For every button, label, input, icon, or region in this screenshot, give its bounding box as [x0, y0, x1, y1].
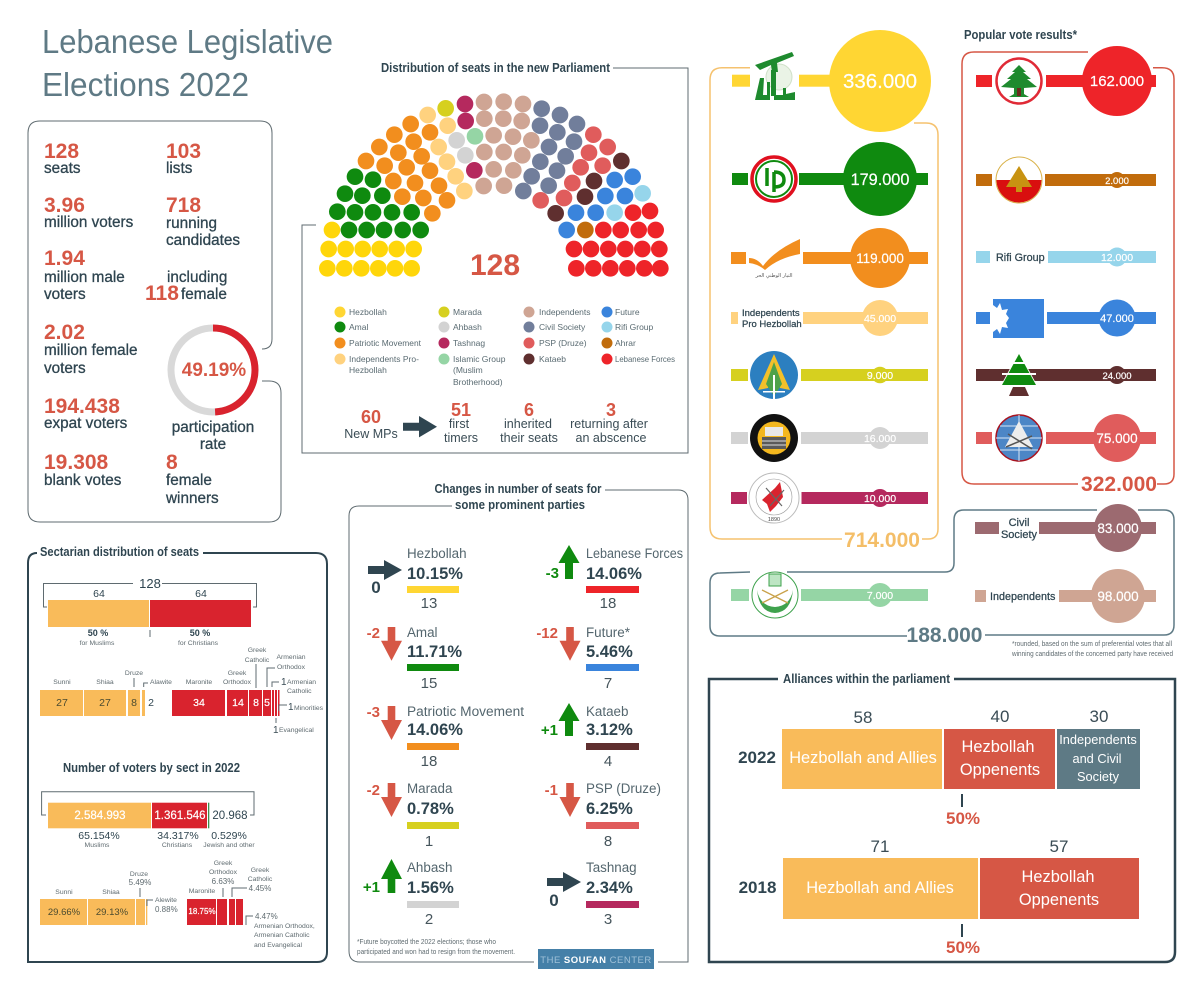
row: Ahbash	[731, 414, 928, 462]
item: Future	[536, 625, 639, 692]
item: Lebanese Forces: 18	[600, 595, 616, 612]
bar: seats by sect: Catholic	[245, 657, 270, 664]
logo: Lebanese Forces	[996, 58, 1042, 104]
stat: expat voters: 194.438	[44, 395, 120, 418]
new MPs breakdown: New MPs	[344, 427, 398, 441]
stat: female voters: million female	[44, 342, 138, 359]
row: Islamic Group: 7.000	[867, 590, 893, 602]
logo: Patriotic Movement	[749, 239, 800, 279]
bar: voters by sect: Maronite	[189, 888, 215, 895]
logo: Tashnag	[749, 473, 799, 523]
legend: Marada	[453, 307, 482, 317]
row: Civil Society: Civil	[1009, 517, 1029, 529]
item: Kataeb: 3.12%	[586, 721, 633, 739]
bar: seats by sect: 8	[253, 697, 259, 709]
bar: voters by sect: Sunni	[55, 889, 73, 896]
panel: popular vote, other bloc	[710, 504, 1174, 658]
item: Future: 5.46%	[586, 643, 633, 661]
logo: Amal	[752, 157, 796, 201]
stat: lists: 103	[166, 140, 201, 163]
bar: seats by sect: Orthodox	[277, 664, 306, 671]
bar: voters by sect: 18.75%	[188, 907, 216, 916]
row: Kataeb: 24.000	[1102, 371, 1132, 382]
item: Ahbash	[363, 859, 459, 928]
bar chart: 2022: Hezbollah	[962, 738, 1034, 756]
stat: female candidates: including	[167, 269, 227, 286]
logo: Ahbash	[750, 414, 798, 462]
legend: Civil Society	[539, 322, 586, 332]
item: Kataeb: Kataeb	[586, 704, 628, 719]
bar: voters by religion	[42, 792, 255, 849]
row: Rifi Group	[976, 248, 1156, 266]
legend: Rifi Group	[615, 322, 654, 332]
new MPs breakdown: 51	[451, 400, 471, 420]
bar: seats by sect: Greek	[248, 647, 267, 654]
bar: voters by religion: 2.584.993	[74, 810, 126, 822]
item: Marada: 1	[425, 833, 433, 850]
bar: voters by sect: Armenian Orthodox,	[254, 923, 315, 930]
item: Lebanese Forces: 14.06%	[586, 565, 642, 583]
legend: Kataeb	[539, 354, 566, 364]
donut chart: participation rate: 49.19%	[182, 360, 246, 381]
item: Hezbollah: 0	[371, 578, 381, 597]
row: Amal: 179.000	[851, 171, 909, 189]
item: Marada	[367, 781, 459, 850]
bar: seats by sect: 27	[99, 697, 111, 709]
stat: expat voters: expat voters	[44, 415, 128, 432]
item: Tashnag: 3	[604, 911, 612, 928]
bar chart: 2018	[739, 837, 1139, 957]
hemicycle chart	[319, 93, 669, 277]
row: Patriotic Movement: 119.000	[856, 251, 904, 266]
row: Future	[976, 299, 1156, 338]
bar: voters by religion: 65.154%	[78, 830, 120, 842]
bar chart: 2022: 50%	[946, 809, 980, 828]
title: Lebanese Legislative	[42, 23, 333, 60]
bar: seats by sect: 14	[232, 697, 244, 709]
heading: voters by sect: Number of voters by sect in 2022	[63, 761, 240, 775]
logo: Future	[993, 299, 1044, 338]
item: Amal: 15	[421, 675, 437, 692]
legend: Ahrar	[615, 338, 636, 348]
stat: candidates	[166, 194, 240, 249]
total: 714.000: 714.000	[844, 529, 920, 552]
stat: candidates: 718	[166, 194, 201, 217]
item: Kataeb: 4	[604, 753, 612, 770]
bar: voters by sect: 6.63%	[212, 877, 234, 886]
bar chart: 2022	[738, 707, 1140, 828]
panel: sectarian distribution of seats	[28, 545, 327, 962]
panel: key figures	[28, 121, 281, 522]
bar: voters by sect: Shiaa	[102, 889, 120, 896]
legend: (Muslim	[453, 365, 483, 375]
heading: alliances: Alliances within the parliament	[783, 672, 951, 686]
stat: female winners: winners	[165, 490, 219, 507]
bar chart: 2018: 2018	[739, 878, 776, 897]
bar chart: 2022: 2022	[738, 748, 776, 767]
row: Independents: 98.000	[1097, 589, 1139, 604]
row: Islamic Group	[731, 572, 928, 618]
stat: voters	[44, 194, 134, 231]
new MPs breakdown: timers	[444, 431, 478, 445]
item: PSP: 6.25%	[586, 800, 633, 818]
item: Kataeb: +1	[541, 722, 558, 739]
new MPs breakdown: an abscence	[576, 431, 646, 445]
legend: Ahbash	[453, 322, 482, 332]
item: Lebanese Forces	[546, 545, 683, 612]
bar: seats by sect	[40, 647, 324, 736]
footnote: Future boycott	[357, 937, 515, 956]
row: Independents	[975, 569, 1156, 623]
item: PSP	[545, 781, 661, 850]
title	[42, 23, 333, 103]
bar chart: 2018: Hezbollah	[1022, 868, 1094, 886]
bar: voters by religion: 34.317%	[157, 830, 199, 842]
bar: voters by sect: 4.45%	[249, 884, 271, 893]
item: Ahbash: +1	[363, 879, 380, 896]
stat: candidates: running	[166, 215, 217, 232]
stat: female winners: female	[166, 472, 212, 489]
new MPs breakdown: their seats	[500, 431, 558, 445]
row: Rifi Group: Rifi Group	[996, 252, 1045, 264]
bar: voters by religion: Christians	[162, 842, 193, 849]
row: Marada	[731, 351, 928, 399]
bar: voters by sect: and Evangelical	[254, 942, 302, 949]
stat: female candidates: 118	[145, 282, 179, 305]
bar chart: 2018: 50%	[946, 938, 980, 957]
bar: seats by sect: 1	[273, 725, 279, 736]
footnote: Future boycott: participated and won had to resign from the movement.	[357, 947, 515, 956]
bar: voters by sect: Druze	[130, 871, 148, 878]
donut chart: participation rate: rate	[200, 436, 226, 453]
row: Tashnag	[731, 473, 928, 523]
legend: Future	[615, 307, 640, 317]
item: Amal: Amal	[407, 625, 438, 640]
row: Rifi Group: 12.000	[1101, 252, 1133, 264]
row: Independents Pro Hezbollah: Independents	[742, 308, 800, 319]
donut chart: participation rate: participation	[172, 419, 254, 436]
item: Hezbollah: 13	[421, 595, 437, 612]
row: Civil Society: 83.000	[1097, 521, 1139, 536]
stat: female voters: 2.02	[44, 321, 85, 344]
bar: seats by sect: Sunni	[53, 679, 71, 686]
stat: lists: lists	[166, 160, 193, 177]
bar: seats by sect: 1	[288, 702, 294, 713]
row: PSP: 75.000	[1096, 431, 1138, 446]
item: Ahbash: 2	[425, 911, 433, 928]
legend: Islamic Group	[453, 354, 506, 364]
bar: seats by sect: Alawite	[150, 679, 172, 686]
stat: female voters	[44, 321, 138, 377]
bar: 128 seats split: 64	[93, 588, 105, 600]
bar: 128 seats split: for Muslims	[80, 640, 115, 647]
item: PSP: PSP (Druze)	[586, 781, 661, 796]
heading: changes: Changes in number of seats for	[434, 482, 602, 496]
new MPs breakdown: first	[449, 417, 470, 431]
title: Elections 2022	[42, 66, 249, 103]
row: Civil Society	[975, 504, 1156, 552]
row: Lebanese Forces	[976, 46, 1156, 116]
bar: voters by sect: Orthodox	[209, 869, 238, 876]
bar: 128 seats split: 50 %	[190, 628, 210, 638]
bar: 128 seats split: 50 %	[88, 628, 108, 638]
stat: male voters: voters	[44, 286, 86, 303]
bar: seats by sect: 1	[281, 677, 287, 688]
heading: changes	[434, 482, 602, 512]
legend: Brotherhood)	[453, 377, 503, 387]
item: Patriotic Movement: 14.06%	[407, 721, 463, 739]
row: PSP	[976, 414, 1156, 462]
bar: voters by sect: Greek	[251, 867, 270, 874]
heading: distribution: Distribution of seats in the new Parliament	[381, 61, 611, 75]
item: Lebanese Forces: Lebanese Forces	[586, 546, 683, 561]
item: Tashnag	[547, 860, 639, 928]
bar chart: 2018: Hezbollah and Allies	[806, 879, 954, 897]
bar: seats by sect: 5	[264, 697, 270, 709]
bar: seats by sect: Maronite	[186, 679, 212, 686]
row: Amal	[732, 142, 928, 216]
bar chart: 2022: Oppenents	[960, 761, 1040, 779]
bar: voters by religion: 1.361.546	[154, 810, 206, 822]
stat: blank votes: blank votes	[44, 472, 122, 489]
stat: seats: 128	[44, 140, 79, 163]
bar chart: 2022: and Civil	[1072, 751, 1122, 766]
row: Independents Pro Hezbollah	[731, 300, 928, 336]
stat: male voters: 1.94	[44, 247, 85, 270]
bar chart: 2022: Independents	[1059, 732, 1137, 747]
row: Independents: Independents	[990, 591, 1056, 603]
item: Ahbash: 1.56%	[407, 879, 454, 897]
bar: seats by sect: 8	[131, 697, 137, 709]
new MPs breakdown: 6	[524, 400, 534, 420]
footnote: rounding	[1011, 639, 1173, 658]
bar: seats by sect: 34	[193, 697, 205, 709]
bar: seats by sect: Catholic	[287, 688, 312, 695]
heading: changes: some prominent parties	[455, 498, 585, 512]
bar: voters by sect: Greek	[214, 860, 233, 867]
bar: seats by sect: Greek	[228, 670, 247, 677]
stat: blank votes	[44, 451, 122, 489]
legend: Patriotic Movement	[349, 338, 422, 348]
item: Amal: 11.71%	[407, 643, 462, 661]
item: Hezbollah: 10.15%	[407, 565, 463, 583]
logo: Kataeb	[1000, 352, 1038, 396]
new MPs breakdown: inherited	[504, 417, 552, 431]
footnote: Future boycott: *Future boycotted the 2022 elections; those who	[357, 937, 496, 946]
bar chart: 2022: Society	[1077, 769, 1120, 784]
item: Amal: -2	[367, 625, 380, 642]
stat: female candidates	[145, 269, 227, 305]
stat: female voters: voters	[44, 360, 86, 377]
bar chart: 2018: 57	[1050, 837, 1068, 856]
logo: Islamic Group	[752, 572, 798, 618]
row: Kataeb	[976, 352, 1156, 396]
new MPs breakdown: 3	[606, 400, 616, 420]
logo: Marada	[750, 351, 798, 399]
stat: voters: 3.96	[44, 194, 85, 217]
item: Patriotic Movement	[367, 704, 524, 770]
item: PSP: -1	[545, 782, 558, 799]
logo: Tashnag: 1890	[768, 517, 780, 523]
item: Patriotic Movement: 18	[421, 753, 437, 770]
item: Tashnag: 2.34%	[586, 879, 633, 897]
bar: seats by sect: Minorities	[294, 705, 324, 712]
row: Lebanese Forces: 162.000	[1090, 73, 1144, 90]
bar chart: 2022: Hezbollah and Allies	[789, 749, 937, 767]
row: Independents Pro Hezbollah: Pro Hezbollah	[742, 319, 802, 330]
panel: changes in seats	[349, 482, 688, 969]
stat: male voters: million male	[44, 269, 125, 286]
legend: Hezbollah	[349, 307, 387, 317]
legend: Hezbollah	[349, 365, 387, 375]
bar: voters by religion: Muslims	[85, 842, 110, 849]
bar chart: 2018: 71	[871, 837, 889, 856]
new MPs breakdown: 60	[361, 407, 381, 427]
bar: seats by sect: Armenian	[287, 679, 316, 686]
bar: voters by sect: 4.47%	[255, 912, 278, 921]
heading: popular vote: Popular vote results*	[964, 28, 1077, 42]
bar: seats by sect: Armenian	[276, 654, 306, 661]
item: Tashnag: Tashnag	[586, 860, 637, 875]
arrow: new MPs	[403, 416, 437, 437]
logo: PSP	[996, 415, 1042, 461]
bar: voters by sect: 5.49%	[129, 878, 151, 887]
stat: female winners: 8	[166, 451, 178, 474]
new MPs breakdown	[344, 400, 648, 445]
stat: candidates: candidates	[166, 232, 240, 249]
bar: seats by sect: Orthodox	[223, 679, 252, 686]
item: Ahbash: Ahbash	[407, 860, 452, 875]
bar: voters by religion: 20.968	[212, 810, 248, 822]
item: Patriotic Movement: Patriotic Movement	[407, 704, 524, 719]
heading: sectarian: Sectarian distribution of seats	[40, 545, 199, 559]
legend: Independents	[539, 307, 591, 317]
item: Hezbollah	[368, 546, 467, 612]
panel: distribution of seats	[302, 61, 688, 453]
bar chart: 2022: 30	[1090, 707, 1108, 726]
footnote: rounding: *rounded, based on the sum of preferential votes that all	[1012, 639, 1172, 648]
item: PSP: 8	[604, 833, 612, 850]
stat: voters: million voters	[44, 214, 134, 231]
bar chart: 2018: Oppenents	[1019, 891, 1099, 909]
total seats number: 128	[470, 249, 520, 282]
bar: seats by sect: Evangelical	[279, 727, 314, 734]
item: Future: Future*	[586, 625, 630, 640]
bar chart: 2022: 40	[991, 707, 1009, 726]
stat: male voters	[44, 247, 125, 303]
bar: 128 seats split: for Christians	[178, 640, 219, 647]
row: Ahbash: 16.000	[864, 433, 896, 445]
item: Marada: -2	[367, 782, 380, 799]
item: Hezbollah: Hezbollah	[407, 546, 467, 561]
new MPs breakdown: returning after	[570, 417, 648, 431]
bar chart: 2022: 58	[854, 708, 872, 727]
row: Marada: 9.000	[867, 370, 893, 382]
row: Ahrar	[976, 157, 1156, 203]
bar: 128 seats split: 64	[195, 588, 207, 600]
row: Civil Society: Society	[1001, 529, 1038, 541]
logo: Ahrar	[996, 157, 1042, 203]
stat: seats: seats	[44, 160, 81, 177]
logo: The Soufan Center: THE SOUFAN CENTER	[540, 955, 652, 966]
stat: expat voters	[44, 395, 128, 432]
item: Patriotic Movement: -3	[367, 704, 380, 721]
stat: lists	[166, 140, 201, 177]
legend: Lebanese Forces	[615, 354, 675, 364]
bar: voters by sect: 0.88%	[155, 905, 178, 914]
bar: seats by sect: 2	[148, 697, 154, 709]
legend: PSP (Druze)	[539, 338, 587, 348]
legend: Tashnag	[453, 338, 485, 348]
stat: blank votes: 19.308	[44, 451, 109, 474]
item: Marada: 0.78%	[407, 800, 454, 818]
logo: The Soufan Center	[538, 949, 654, 969]
bar: seats by sect: Druze	[125, 670, 143, 677]
row: Hezbollah: 336.000	[843, 70, 917, 93]
bar: voters by sect: 29.13%	[96, 907, 129, 918]
legend: Amal	[349, 322, 368, 332]
stat: female candidates: female	[181, 286, 227, 303]
item: Future: -12	[536, 625, 558, 642]
logo: Patriotic Movement: التيار الوطني الحر	[754, 273, 793, 279]
panel: popular vote results, opposition bloc	[962, 28, 1174, 496]
bar: 128 seats split: 128	[139, 576, 161, 591]
bar: voters by sect: 29.66%	[48, 907, 81, 918]
total: 188.000: 188.000	[907, 624, 982, 647]
item: Kataeb	[541, 703, 639, 770]
bar: seats by sect: 27	[56, 697, 68, 709]
item: Marada: Marada	[407, 781, 453, 796]
row: Ahrar: 2.000	[1105, 176, 1129, 187]
bar: voters by religion: 0.529%	[211, 830, 247, 842]
row: Patriotic Movement	[731, 228, 928, 288]
total: 322.000: 322.000	[1081, 473, 1157, 496]
bar: seats by sect: Shiaa	[96, 679, 114, 686]
item: Tashnag: 0	[549, 891, 559, 910]
bar: 128 seats split	[44, 576, 256, 647]
stat: seats	[44, 140, 81, 177]
legend: Independents Pro-	[349, 354, 419, 364]
item: Future: 7	[604, 675, 612, 692]
row: Future: 47.000	[1100, 313, 1134, 325]
bar: voters by sect: Catholic	[248, 876, 273, 883]
bar: voters by sect: Alewite	[155, 897, 177, 904]
row: Tashnag: 10.000	[864, 493, 896, 505]
item: Lebanese Forces: -3	[546, 565, 559, 582]
panel: popular vote, Hezbollah bloc	[710, 30, 938, 552]
bar: voters by religion: Jewish and other	[203, 842, 255, 849]
panel: alliances within the parliament	[709, 672, 1175, 962]
stat: female winners	[165, 451, 219, 507]
donut chart: participation rate	[171, 328, 255, 453]
legend	[334, 306, 675, 387]
item: Amal	[367, 625, 462, 692]
row: Independents Pro Hezbollah: 45.000	[864, 313, 896, 325]
row: Hezbollah	[732, 30, 931, 132]
bar: voters by sect: Armenian Catholic	[254, 932, 310, 939]
logo: Hezbollah	[755, 52, 795, 100]
bar: voters by sect	[40, 860, 315, 949]
